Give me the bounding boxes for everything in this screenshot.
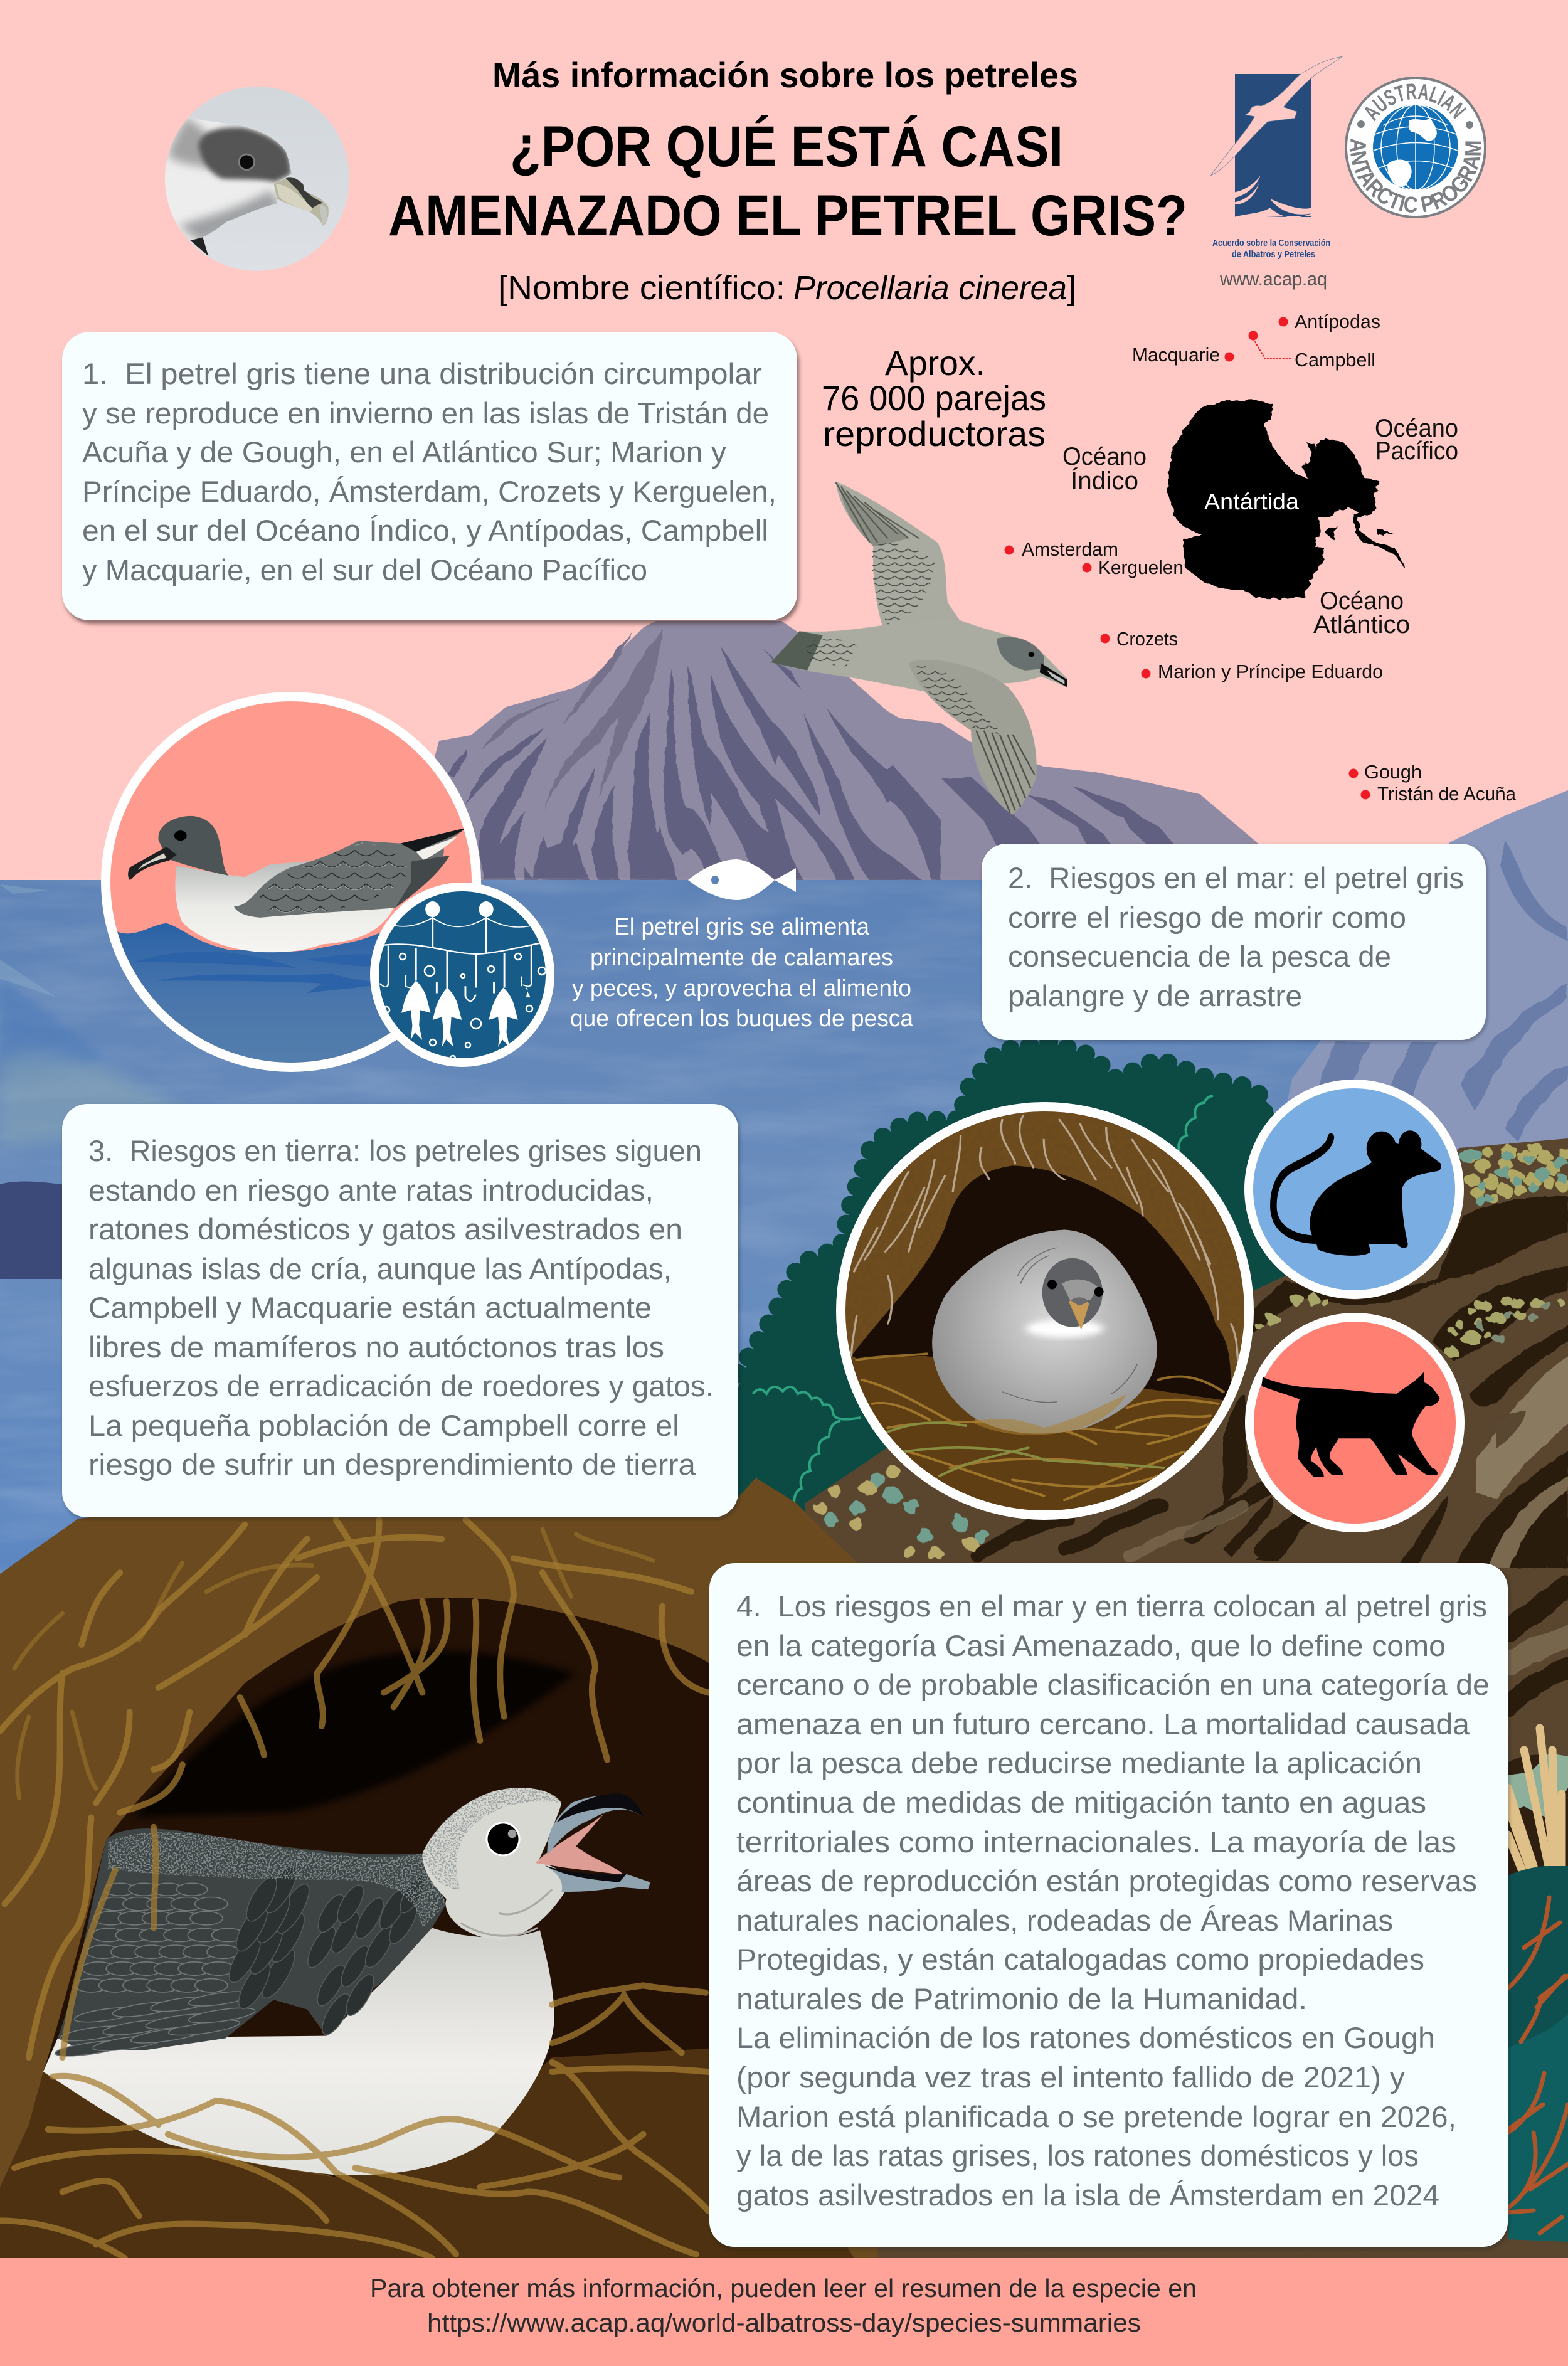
text box 4: gatos asilvestrados en la isla de Ámsterdam en 2024: [736, 2178, 1439, 2212]
text box 3: libres de mamíferos no autóctonos tras los: [88, 1330, 664, 1364]
text box 3: [62, 1104, 738, 1517]
text box 4: naturales de Patrimonio de la Humanidad.: [736, 1982, 1307, 2015]
fish caption: El petrel gris se alimenta: [614, 914, 870, 940]
text box 4: Protegidas, y están catalogadas como propiedades: [736, 1943, 1424, 1976]
island on horizon: [0, 1182, 69, 1279]
map: island markers: Marion y Príncipe Eduardo: [1158, 660, 1383, 682]
text box 3: riesgo de sufrir un desprendimiento de tierra: [88, 1448, 696, 1481]
breeding pairs count: 76 000 parejas: [822, 378, 1046, 418]
map: island markers: Tristán de Acuña: [1377, 783, 1517, 805]
map: island markers: Macquarie: [1132, 344, 1220, 366]
map: ocean labels: Océano: [1375, 415, 1458, 442]
map: island markers: Kerguelen: [1098, 556, 1184, 578]
icon: white fish: [688, 859, 796, 900]
roots and nest strands: [0, 1520, 709, 2258]
text box 3: La pequeña población de Campbell corre el: [88, 1409, 679, 1442]
text box 3: Campbell y Macquarie están actualmente: [88, 1291, 652, 1324]
text box 4: [709, 1563, 1508, 2247]
footer band: [0, 2258, 1568, 2366]
ACAP caption: [1212, 238, 1330, 260]
circle: chick in burrow: [834, 1098, 1261, 1532]
map: island markers: Antípodas: [1295, 310, 1380, 332]
map: ocean labels: Océano: [1062, 443, 1147, 470]
text box 3: ratones domésticos y gatos asilvestrados en: [88, 1212, 682, 1246]
circle: bird on the sea: [93, 692, 483, 1079]
big petrel bird: [43, 1788, 650, 2175]
right-edge grass and bushes: [1508, 1728, 1568, 2242]
circle: petrel head photo: [160, 87, 349, 271]
sea inside circle: [93, 923, 395, 1079]
fish caption: que ofrecen los buques de pesca: [570, 1005, 914, 1032]
text box 3: algunas islas de cría, aunque las Antípodas,: [88, 1252, 672, 1285]
map: Antarctica: Antártida: [1204, 489, 1300, 514]
small title: Más información sobre los petreles: [492, 55, 1078, 95]
burrow mound with adult petrel scene: [0, 1478, 878, 2273]
map: ocean labels: [1062, 415, 1458, 639]
map: ocean labels: Pacífico: [1375, 437, 1458, 465]
acap url: www.acap.aq: [1219, 268, 1327, 290]
breeding pairs count: Aprox.: [885, 343, 985, 383]
text box 4: continua de medidas de mitigación tanto en aguas: [736, 1786, 1426, 1819]
map: ocean labels: Océano: [1320, 587, 1404, 615]
second set of faint roots: [14, 1529, 653, 1798]
text box 4: Marion está planificada o se pretende lograr en 2026,: [736, 2100, 1456, 2133]
breeding pairs count: reproductoras: [823, 414, 1046, 454]
fish caption: y peces, y aprovecha el alimento: [572, 975, 911, 1002]
ACAP caption: Acuerdo sobre la Conservación: [1212, 238, 1330, 248]
footer text: Para obtener más información, pueden leer el resumen de la especie en: [370, 2274, 1197, 2303]
text box 4: y la de las ratas grises, los ratones domésticos y los: [736, 2139, 1419, 2172]
lower wing: [909, 660, 1037, 815]
circle: longline fishing icon: [370, 883, 554, 1067]
breeding pairs count: [822, 343, 1046, 454]
text box 1: y Macquarie, en el sur del Océano Pacífico: [82, 553, 647, 586]
scientific name: [498, 269, 1076, 307]
background: volcano mountain: [401, 621, 1286, 881]
map: island markers: Crozets: [1116, 628, 1178, 650]
text box 1: y se reproduce en invierno en las islas de Tristán de: [82, 396, 769, 430]
logo: Australian Antarctic Program: [1345, 78, 1486, 218]
nest strands: [857, 1354, 1223, 1500]
map: island markers: Amsterdam: [1022, 538, 1118, 560]
grey chick: [932, 1229, 1157, 1434]
map: island markers: Gough: [1364, 761, 1422, 783]
map: island markers: Campbell: [1295, 349, 1375, 371]
burrow scene group: [0, 1520, 864, 2273]
main title: [388, 114, 1187, 248]
text box 1: en el sur del Océano Índico, y Antípodas, Campbell: [82, 514, 768, 547]
text box 4: naturales nacionales, rodeadas de Áreas Marinas: [736, 1904, 1393, 1937]
fish caption: [570, 914, 914, 1032]
background: far right mountain: [1273, 790, 1568, 1192]
text box 1: 1. El petrel gris tiene una distribución circumpolar: [82, 357, 762, 390]
text box 4: territoriales como internacionales. La mayoría de las: [736, 1825, 1456, 1859]
scientific name: Procellaria cinerea: [793, 269, 1067, 307]
text box 4: áreas de reproducción están protegidas como reservas: [736, 1864, 1477, 1897]
logo: ACAP: [1211, 56, 1342, 260]
footer text: [370, 2274, 1197, 2337]
text box 4: por la pesca debe reducirse mediante la aplicación: [736, 1746, 1422, 1780]
swimming petrel: [128, 816, 465, 952]
main title: AMENAZADO EL PETREL GRIS?: [388, 184, 1187, 248]
text box 1: [62, 332, 797, 620]
main title: ¿POR QUÉ ESTÁ CASI: [510, 114, 1063, 179]
text box 3: estando en riesgo ante ratas introducidas,: [88, 1174, 654, 1207]
lichen patches: [814, 1143, 1568, 1560]
ACAP caption: de Albatros y Petreles: [1232, 250, 1315, 260]
text box 1: Acuña y de Gough, en el Atlántico Sur; Marion y: [82, 435, 727, 469]
circle: rat silhouette: [1244, 1080, 1464, 1299]
ground: right hillside: [805, 1138, 1568, 2261]
background: sea: [0, 880, 1568, 1633]
map: ocean labels: Índico: [1071, 467, 1138, 495]
text box 4: amenaza en un futuro cercano. La mortalidad causada: [736, 1707, 1470, 1741]
map: island markers: [1005, 310, 1517, 805]
text box 4: La eliminación de los ratones domésticos en Gough: [736, 2021, 1435, 2054]
text box 2: corre el riesgo de morir como: [1008, 901, 1406, 934]
scientific name: [Nombre científico:: [498, 269, 785, 307]
fish caption: principalmente de calamares: [590, 945, 893, 971]
footer text: https://www.acap.aq/world-albatross-day/species-summaries: [427, 2308, 1141, 2337]
upper wing: [836, 482, 961, 627]
background: sky: [0, 0, 1568, 881]
text box 2: [982, 844, 1486, 1040]
text box 4: 4. Los riesgos en el mar y en tierra colocan al petrel gris: [736, 1589, 1487, 1623]
flying petrel: [771, 482, 1067, 815]
text box 1: Príncipe Eduardo, Ámsterdam, Crozets y Kerguelen,: [82, 475, 776, 508]
circle: cat silhouette: [1245, 1313, 1465, 1532]
map: ocean labels: Atlántico: [1313, 611, 1410, 639]
scientific name: ]: [1067, 269, 1076, 307]
text box 2: consecuencia de la pesca de: [1008, 940, 1391, 973]
text box 3: 3. Riesgos en tierra: los petreles grises siguen: [88, 1134, 702, 1167]
text box 4: (por segunda vez tras el intento fallido de 2021) y: [736, 2061, 1406, 2094]
body and tail: [771, 620, 1067, 692]
text box 2: 2. Riesgos en el mar: el petrel gris: [1008, 861, 1464, 894]
logo: Australian Antarctic Program: AUSTRALIAN: [1365, 83, 1466, 122]
logo: Australian Antarctic Program: ANTARCTIC PROGRAM: [1345, 138, 1486, 218]
text box 4: en la categoría Casi Amenazado, que lo define como: [736, 1629, 1446, 1662]
map: Antarctica: [1167, 399, 1405, 598]
text box 2: palangre y de arrastre: [1008, 979, 1302, 1012]
text box 3: esfuerzos de erradicación de roedores y gatos.: [88, 1369, 714, 1403]
green bushes: [690, 1042, 1317, 1556]
text box 4: cercano o de probable clasificación en una categoría de: [736, 1668, 1490, 1701]
burrow roof rootlets: [852, 1116, 1239, 1364]
